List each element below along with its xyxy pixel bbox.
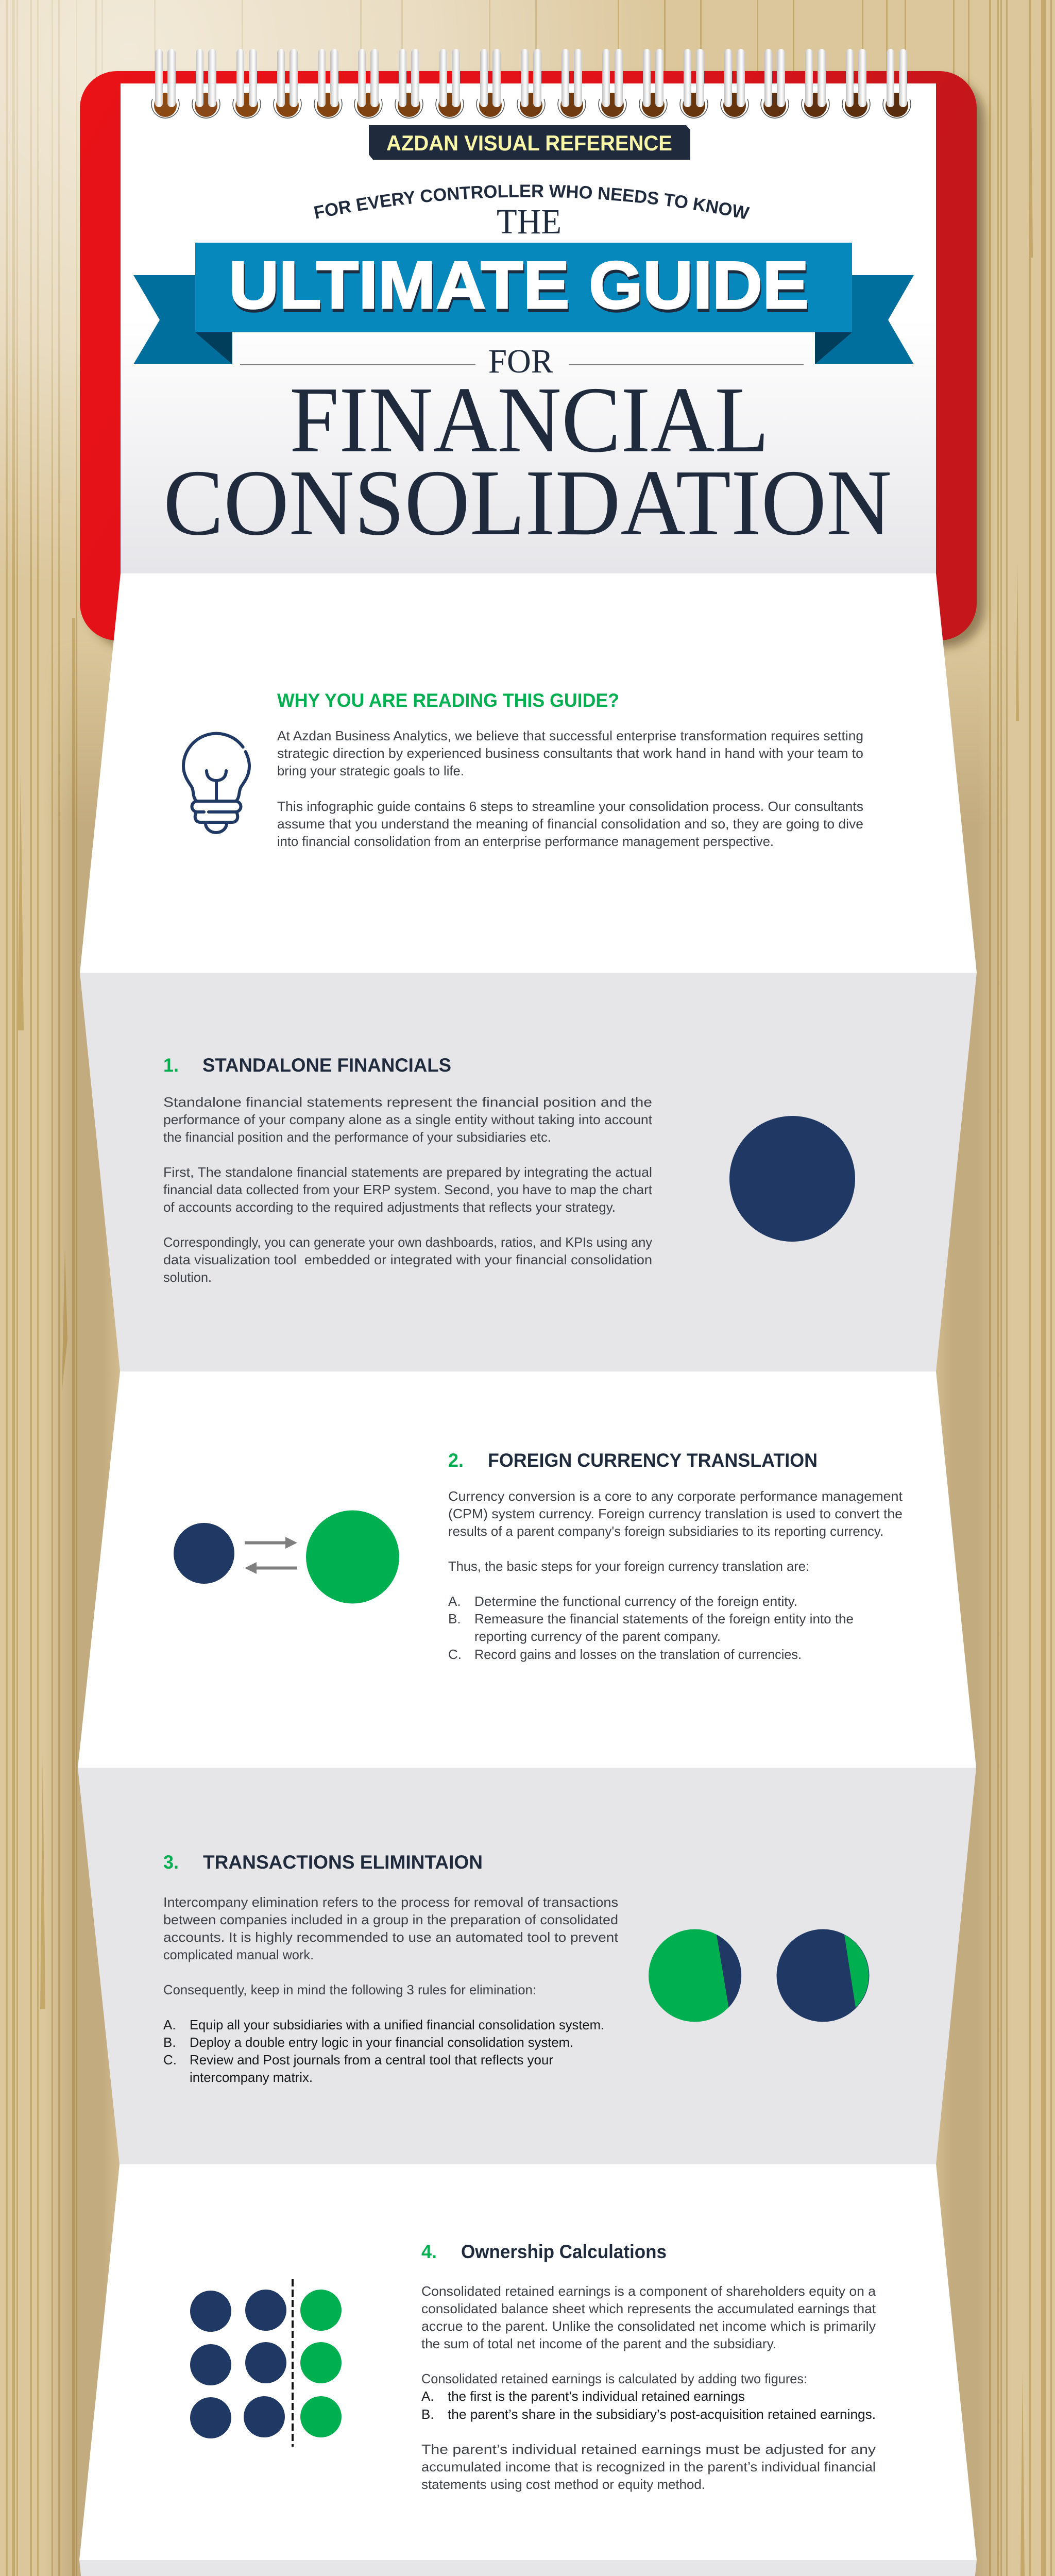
icon: light bulb <box>183 734 249 833</box>
icon: green circle with navy slice <box>649 1929 741 2022</box>
spiral binding <box>151 49 911 118</box>
text block: step 3: between companies included in a group in the preparation of consolidated <box>163 1912 618 1927</box>
text block: step 2: B. <box>448 1611 461 1626</box>
curved subtitle: FOR EVERY CONTROLLER WHO NEEDS TO KNOW <box>314 184 750 219</box>
text block: intro: bring your strategic goals to life. <box>277 763 464 778</box>
text block: step 2: Determine the functional currency of the foreign entity. <box>474 1594 797 1609</box>
text block: step 3: complicated manual work. <box>163 1947 314 1962</box>
panel: step 4 <box>79 2164 977 2560</box>
text block: step 4: the sum of total net income of the parent and the subsidiary. <box>421 2336 776 2351</box>
text block: step 2: Record gains and losses on the translation of currencies. <box>474 1647 802 1662</box>
text block: step 2: results of a parent company's foreign subsidiaries to its reporting currency. <box>448 1523 883 1539</box>
text block: step 4: Consolidated retained earnings is a component of shareholders equity on a <box>421 2283 876 2299</box>
text block: intro <box>277 728 863 849</box>
heading: step 1: 1. <box>163 1055 179 1076</box>
title: financial consolidation <box>163 367 892 555</box>
text block: intro: into financial consolidation from an enterprise performance management perspective. <box>277 834 774 849</box>
text block: step 1: the financial position and the performance of your subsidiaries etc. <box>163 1129 551 1145</box>
ribbon: ultimate guide: ULTIMATE GUIDE <box>229 247 809 323</box>
heading: step 3: TRANSACTIONS ELIMINTAION <box>203 1852 483 1873</box>
text block: step 3: accounts. It is highly recommended to use an automated tool to prevent <box>163 1929 619 1945</box>
page shadow on wood <box>44 639 1011 2576</box>
text block: intro: At Azdan Business Analytics, we believe that successful enterprise transformation requires setting <box>277 728 863 743</box>
text block: intro: This infographic guide contains 6 steps to streamline your consolidation process. Our consultants <box>277 799 863 814</box>
notebook cover <box>80 71 985 648</box>
text block: step 2 <box>448 1488 903 1662</box>
badge: Azdan visual reference <box>369 125 690 160</box>
text block: step 1: Correspondingly, you can generate your own dashboards, ratios, and KPIs using any <box>163 1234 652 1250</box>
text block: step 3: C. <box>163 2052 177 2067</box>
text block: step 2: Currency conversion is a core to any corporate performance management <box>448 1488 903 1504</box>
text block: step 4 <box>421 2283 876 2492</box>
panel: step 3 <box>78 1768 976 2164</box>
text block: step 1: First, The standalone financial statements are prepared by integrating the actual <box>163 1164 652 1180</box>
heading: step 3: 3. <box>163 1852 179 1873</box>
icon: navy circle <box>729 1116 855 1242</box>
icon: navy circle with green slice <box>777 1929 870 2022</box>
text block: step 1: Standalone financial statements represent the financial position and the <box>163 1094 652 1110</box>
title: FOR with rules: FOR <box>488 343 553 380</box>
text block: step 4: consolidated balance sheet which represents the accumulated earnings that <box>421 2301 876 2316</box>
badge: Azdan visual reference: AZDAN VISUAL REFERENCE <box>386 131 672 155</box>
ribbon: ultimate guide <box>133 243 914 364</box>
text block: step 4: The parent’s individual retained earnings must be adjusted for any <box>421 2442 876 2457</box>
panel: intro <box>80 573 977 973</box>
panel: step 2 <box>78 1371 976 1768</box>
text block: step 4: B. <box>421 2406 434 2422</box>
text block: step 3: Consequently, keep in mind the following 3 rules for elimination: <box>163 1982 536 1997</box>
text block: step 3: intercompany matrix. <box>190 2070 313 2085</box>
panel: step 1 <box>80 973 977 1371</box>
text block: step 3 <box>163 1894 619 2085</box>
text block: step 4: statements using cost method or equity method. <box>421 2477 705 2492</box>
title: THE: THE <box>497 202 561 241</box>
icon: ownership dot grid <box>190 2279 342 2447</box>
text block: step 1: financial data collected from your ERP system. Second, you have to map the chart <box>163 1182 653 1197</box>
heading: step 1: STANDALONE FINANCIALS <box>202 1055 451 1076</box>
icon: currency circles with arrows <box>174 1511 399 1603</box>
text block: step 4: Consolidated retained earnings is calculated by adding two figures: <box>421 2371 807 2386</box>
text block: step 2: reporting currency of the parent company. <box>474 1629 721 1644</box>
text block: step 1: data visualization tool embedded or integrated with your financial consolidation <box>163 1252 652 1267</box>
text block: step 4: accrue to the parent. Unlike the consolidated net income which is primarily <box>421 2318 876 2334</box>
text block: step 2: (CPM) system currency. Foreign currency translation is used to convert the <box>448 1506 903 1521</box>
text block: step 1 <box>163 1094 653 1285</box>
text block: step 4: the first is the parent’s individual retained earnings <box>448 2388 745 2404</box>
text block: step 3: B. <box>163 2035 176 2050</box>
title: financial consolidation: FINANCIAL <box>290 367 769 472</box>
text block: step 3: A. <box>163 2017 176 2032</box>
text block: step 2: C. <box>448 1647 462 1662</box>
text block: step 1: of accounts according to the required adjustments that reflects your strategy. <box>163 1199 616 1215</box>
text block: step 4: accumulated income that is recognized in the parent’s individual financial <box>421 2459 876 2475</box>
text block: intro: assume that you understand the meaning of financial consolidation and so, they are going to dive <box>277 816 863 832</box>
text block: step 1: solution. <box>163 1269 212 1285</box>
text block: step 3: Intercompany elimination refers to the process for removal of transactions <box>163 1894 618 1910</box>
text block: step 3: Equip all your subsidiaries with a unified financial consolidation system. <box>190 2017 604 2032</box>
text block: step 4: A. <box>421 2388 434 2404</box>
text block: step 3: Deploy a double entry logic in your financial consolidation system. <box>190 2035 573 2050</box>
text block: step 2: A. <box>448 1594 461 1609</box>
text block: step 2: Thus, the basic steps for your foreign currency translation are: <box>448 1558 809 1574</box>
heading: step 4: 4. <box>421 2241 437 2262</box>
heading: why: WHY YOU ARE READING THIS GUIDE? <box>277 690 619 711</box>
panel: step 5 <box>79 2560 977 2576</box>
text block: step 3: Review and Post journals from a central tool that reflects your <box>190 2052 553 2067</box>
text block: intro: strategic direction by experienced business consultants that work hand in hand with your team to <box>277 745 863 761</box>
text block: step 2: Remeasure the financial statements of the foreign entity into the <box>474 1611 854 1626</box>
heading: step 2: 2. <box>448 1450 464 1471</box>
heading: step 2: FOREIGN CURRENCY TRANSLATION <box>488 1450 818 1471</box>
title: financial consolidation: CONSOLIDATION <box>163 450 892 555</box>
text block: step 4: the parent’s share in the subsidiary’s post-acquisition retained earnings. <box>448 2406 876 2422</box>
text block: step 1: performance of your company alone as a single entity without taking into account <box>163 1112 653 1127</box>
heading: step 4: Ownership Calculations <box>461 2241 667 2262</box>
